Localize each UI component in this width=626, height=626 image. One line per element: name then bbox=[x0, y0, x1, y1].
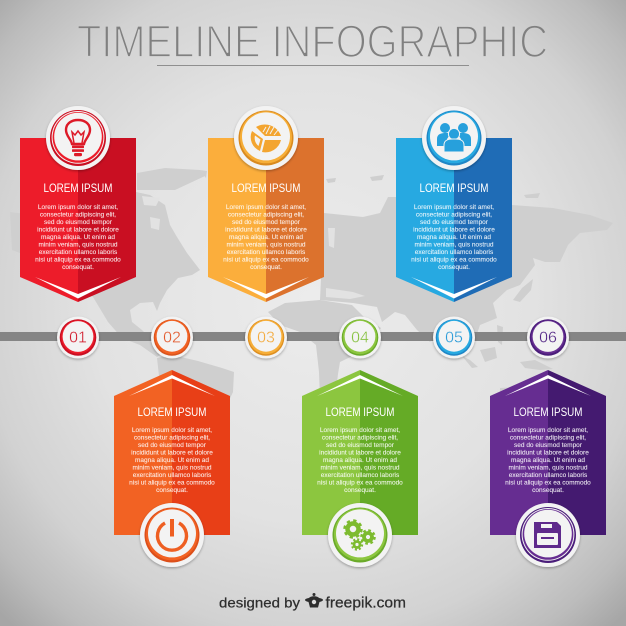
body text: nisi ut aliquip ex ea commodo bbox=[411, 256, 497, 264]
body text: nisi ut aliquip ex ea commodo bbox=[317, 480, 403, 486]
body text: consequat. bbox=[156, 487, 188, 494]
body text: exercitation ullamco laboris bbox=[133, 472, 212, 479]
body text: incididunt ut labore et dolore bbox=[507, 450, 589, 456]
step 04 bbox=[339, 316, 381, 358]
body text: consectetur adipiscing elit, bbox=[228, 212, 304, 218]
step 06 bbox=[527, 316, 569, 358]
icon: power bbox=[140, 503, 204, 567]
body text: magna aliqua. Ut enim ad bbox=[323, 457, 397, 464]
body text: Lorem ipsum dolor sit amet, bbox=[320, 427, 400, 434]
body text: incididunt ut labore et dolore bbox=[413, 226, 495, 234]
step 03: 03 bbox=[257, 330, 275, 346]
footer credit bbox=[219, 593, 406, 612]
body text: consequat. bbox=[344, 487, 376, 494]
body text: exercitation ullamco laboris bbox=[509, 472, 588, 479]
body text: Lorem ipsum dolor sit amet, bbox=[508, 427, 588, 434]
footer credit: designed by bbox=[219, 594, 300, 610]
panel: purple bbox=[490, 370, 606, 535]
heading: LOREM IPSUM bbox=[232, 182, 300, 195]
icon: gears bbox=[328, 503, 392, 567]
body text: magna aliqua. Ut enim ad bbox=[511, 457, 585, 464]
world map bbox=[10, 168, 613, 462]
body text: incididunt ut labore et dolore bbox=[37, 226, 119, 234]
map seas bbox=[142, 196, 365, 299]
body text: incididunt ut labore et dolore bbox=[319, 450, 401, 456]
heading: LOREM IPSUM bbox=[420, 182, 488, 195]
icon: freepik logo bbox=[305, 593, 323, 608]
body text: sed do eiusmod tempor bbox=[232, 219, 301, 226]
body text: magna aliqua. Ut enim ad bbox=[229, 234, 303, 241]
body text: consectetur adipiscing elit, bbox=[416, 212, 492, 218]
body text: consequat. bbox=[250, 264, 282, 271]
body text: exercitation ullamco laboris bbox=[415, 249, 494, 256]
body text: minim veniam, quis nostrud bbox=[38, 242, 118, 248]
body text: nisi ut aliquip ex ea commodo bbox=[129, 480, 215, 486]
panel: red bbox=[20, 138, 136, 302]
step 01 bbox=[57, 316, 99, 358]
heading: LOREM IPSUM bbox=[514, 406, 582, 419]
body text: exercitation ullamco laboris bbox=[39, 249, 118, 256]
step 06: 06 bbox=[539, 330, 557, 346]
body text: sed do eiusmod tempor bbox=[420, 219, 489, 226]
body text: consectetur adipiscing elit, bbox=[134, 434, 210, 442]
step 02 bbox=[151, 316, 193, 358]
body text: minim veniam, quis nostrud bbox=[226, 242, 306, 248]
title: TIMELINE INFOGRAPHIC bbox=[77, 16, 548, 67]
panel: blue bbox=[396, 138, 512, 302]
body text: Lorem ipsum dolor sit amet, bbox=[132, 427, 212, 434]
body text: exercitation ullamco laboris bbox=[321, 472, 400, 479]
heading: LOREM IPSUM bbox=[138, 406, 206, 419]
body text: incididunt ut labore et dolore bbox=[131, 450, 213, 456]
step 01: 01 bbox=[69, 330, 87, 346]
heading: LOREM IPSUM bbox=[44, 182, 112, 195]
body text: sed do eiusmod tempor bbox=[44, 219, 113, 226]
panel: orange bbox=[114, 370, 230, 535]
body text: consectetur adipiscing elit, bbox=[510, 434, 586, 442]
body text: incididunt ut labore et dolore bbox=[225, 226, 307, 234]
timeline bar bbox=[0, 332, 626, 341]
step 04: 04 bbox=[351, 330, 369, 346]
body text: minim veniam, quis nostrud bbox=[508, 464, 588, 472]
body text: consectetur adipiscing elit, bbox=[322, 434, 398, 442]
body text: nisi ut aliquip ex ea commodo bbox=[223, 256, 309, 264]
body text: sed do eiusmod tempor bbox=[514, 442, 583, 449]
body text: nisi ut aliquip ex ea commodo bbox=[35, 256, 121, 264]
icon: floppy disk bbox=[516, 503, 580, 567]
step 02: 02 bbox=[163, 330, 181, 346]
body text: nisi ut aliquip ex ea commodo bbox=[505, 480, 591, 486]
panel: green bbox=[302, 370, 418, 535]
heading: LOREM IPSUM bbox=[326, 406, 394, 419]
body text: Lorem ipsum dolor sit amet, bbox=[226, 204, 306, 211]
step 03 bbox=[245, 316, 287, 358]
body text: sed do eiusmod tempor bbox=[326, 442, 395, 449]
body text: magna aliqua. Ut enim ad bbox=[135, 457, 209, 464]
body text: minim veniam, quis nostrud bbox=[132, 464, 212, 472]
body text: consequat. bbox=[62, 264, 94, 271]
step 05 bbox=[433, 316, 475, 358]
icon: light bulb bbox=[46, 106, 110, 170]
body text: exercitation ullamco laboris bbox=[227, 249, 306, 256]
footer credit: freepik.com bbox=[326, 596, 406, 612]
body text: consectetur adipiscing elit, bbox=[40, 212, 116, 218]
body text: consequat. bbox=[532, 487, 564, 494]
body text: minim veniam, quis nostrud bbox=[320, 464, 400, 472]
body text: Lorem ipsum dolor sit amet, bbox=[38, 204, 118, 211]
body text: magna aliqua. Ut enim ad bbox=[41, 234, 115, 241]
step 05: 05 bbox=[445, 330, 463, 346]
panel: yellow-orange bbox=[208, 138, 324, 302]
body text: sed do eiusmod tempor bbox=[138, 442, 207, 449]
body text: consequat. bbox=[438, 264, 470, 271]
body text: minim veniam, quis nostrud bbox=[414, 242, 494, 248]
body text: magna aliqua. Ut enim ad bbox=[417, 234, 491, 241]
body text: Lorem ipsum dolor sit amet, bbox=[414, 204, 494, 211]
icon: pie chart bbox=[234, 106, 298, 170]
icon: people bbox=[422, 106, 486, 170]
